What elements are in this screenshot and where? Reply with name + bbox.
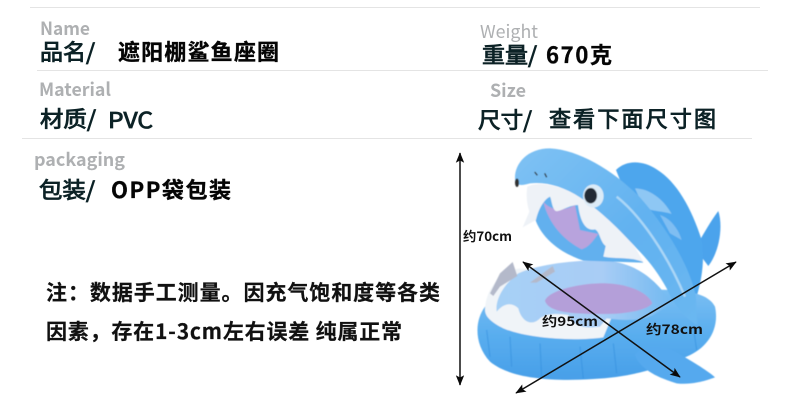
float body: [477, 287, 716, 380]
mouth interior blue: [535, 190, 643, 263]
field: packaging: packaging: [34, 146, 125, 172]
dimension label: 95cm: 约95cm: [542, 311, 598, 330]
shark canopy: [515, 148, 697, 325]
note: measurement disclaimer: [46, 277, 440, 346]
field: name: 品名/: [40, 35, 95, 67]
field: weight: [480, 18, 612, 70]
float tail: [635, 347, 715, 384]
arrow: width 95cm: [523, 262, 680, 377]
white upper lip and teeth: [523, 184, 643, 262]
field: packaging: 包装/: [39, 173, 95, 205]
dimension label: 70cm: 约70cm: [463, 226, 512, 245]
field: material: Material: [39, 76, 111, 102]
field: weight: 670克: [546, 38, 612, 70]
note: measurement disclaimer: 因素，存在1-3cm左右误差 纯属正常: [46, 316, 402, 346]
back fin: [616, 162, 703, 297]
field: name: Name: [40, 15, 90, 41]
field: size: 尺寸/: [478, 103, 532, 135]
arrow: width 78cm: [516, 262, 736, 393]
field: material: PVC: [108, 103, 153, 135]
tail fin: [700, 211, 720, 266]
field: size: Size: [490, 77, 526, 103]
field: name: 遮阳棚鲨鱼座圈: [118, 35, 279, 67]
field: material: [39, 76, 153, 135]
field: size: [478, 77, 716, 135]
field: name: [40, 15, 279, 67]
note: measurement disclaimer: 注：数据手工测量。因充气饱和度等各类: [46, 277, 440, 307]
nostrils: [515, 178, 519, 187]
seat ring: [496, 260, 672, 327]
field: size: 查看下面尺寸图: [549, 102, 716, 134]
product: inflatable shark float: [477, 148, 720, 384]
white lower lip: [485, 268, 613, 339]
field: weight: 重量/: [482, 38, 537, 70]
dimension label: 78cm: 约78cm: [646, 319, 703, 338]
field: material: 材质/: [40, 102, 96, 134]
field: packaging: OPP袋包装: [111, 173, 231, 205]
field: weight: Weight: [480, 18, 538, 44]
purple seat: [545, 283, 652, 314]
eye: [583, 184, 604, 208]
lower teeth: [490, 262, 517, 296]
purple palate: [543, 202, 598, 249]
arrow: height: [459, 153, 461, 385]
field: packaging: [34, 146, 231, 205]
